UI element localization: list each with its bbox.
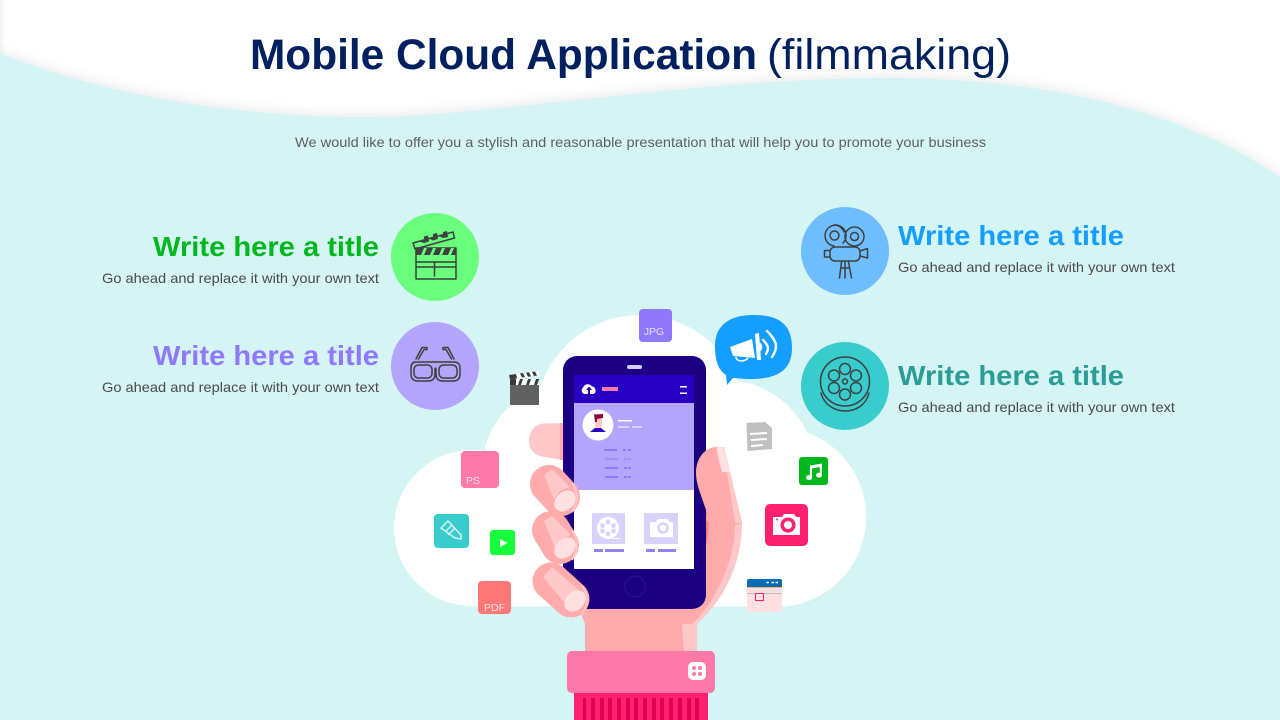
icon: browser window (747, 579, 782, 612)
thumbnail: camera (644, 513, 678, 552)
item: blue title: Write here a title (898, 220, 1124, 251)
item: blue title: Go ahead and replace it with your own text (898, 259, 1175, 275)
item: purple title: Go ahead and replace it with your own text (102, 379, 379, 395)
subtitle: We would like to offer you a stylish and reasonable presentation that will help you to promote your business (295, 134, 986, 150)
icon: small clapperboard (509, 371, 540, 405)
file icon: PS: PS (466, 475, 480, 487)
icon: megaphone speech bubble (715, 315, 792, 385)
finger three (543, 567, 590, 616)
hand behind phone (529, 423, 742, 624)
item: blue title (898, 220, 1175, 275)
file icon: JPG (639, 309, 672, 342)
file icon: JPG: JPG (644, 326, 664, 338)
icon: film reel circle (801, 342, 889, 430)
icon: film camera circle (801, 207, 889, 295)
item: teal title: Go ahead and replace it with your own text (898, 399, 1175, 415)
icon: music tile (799, 457, 828, 485)
icon: clapperboard circle (391, 213, 479, 301)
phone screen (574, 375, 694, 569)
icon: play tile (490, 530, 515, 555)
icon: document (746, 422, 772, 451)
item: purple title: Write here a title (153, 340, 379, 371)
finger two (544, 516, 580, 563)
file icon: PS (461, 451, 499, 488)
file icon: PDF (478, 581, 511, 614)
file icon: PDF: PDF (484, 602, 505, 614)
phone (563, 356, 706, 609)
item: teal title: Write here a title (898, 360, 1124, 391)
item: teal title (898, 360, 1175, 415)
item: green title (102, 231, 379, 286)
item: green title: Go ahead and replace it with your own text (102, 270, 379, 286)
item: purple title (102, 340, 379, 395)
hand fingers and thumb (543, 447, 742, 616)
title: Mobile Cloud Application (250, 31, 757, 79)
icon: camera tile (765, 504, 808, 546)
icon: 3D glasses circle (391, 322, 479, 410)
item: green title: Write here a title (153, 231, 379, 262)
thumbnail: film reel (592, 513, 625, 552)
title: (filmmaking) (767, 31, 1011, 79)
forearm and sleeve (567, 600, 715, 720)
finger one (544, 469, 580, 516)
title (250, 31, 1011, 79)
thumb (696, 447, 742, 535)
icon: pencil tile (434, 514, 469, 548)
cloud (394, 315, 866, 607)
